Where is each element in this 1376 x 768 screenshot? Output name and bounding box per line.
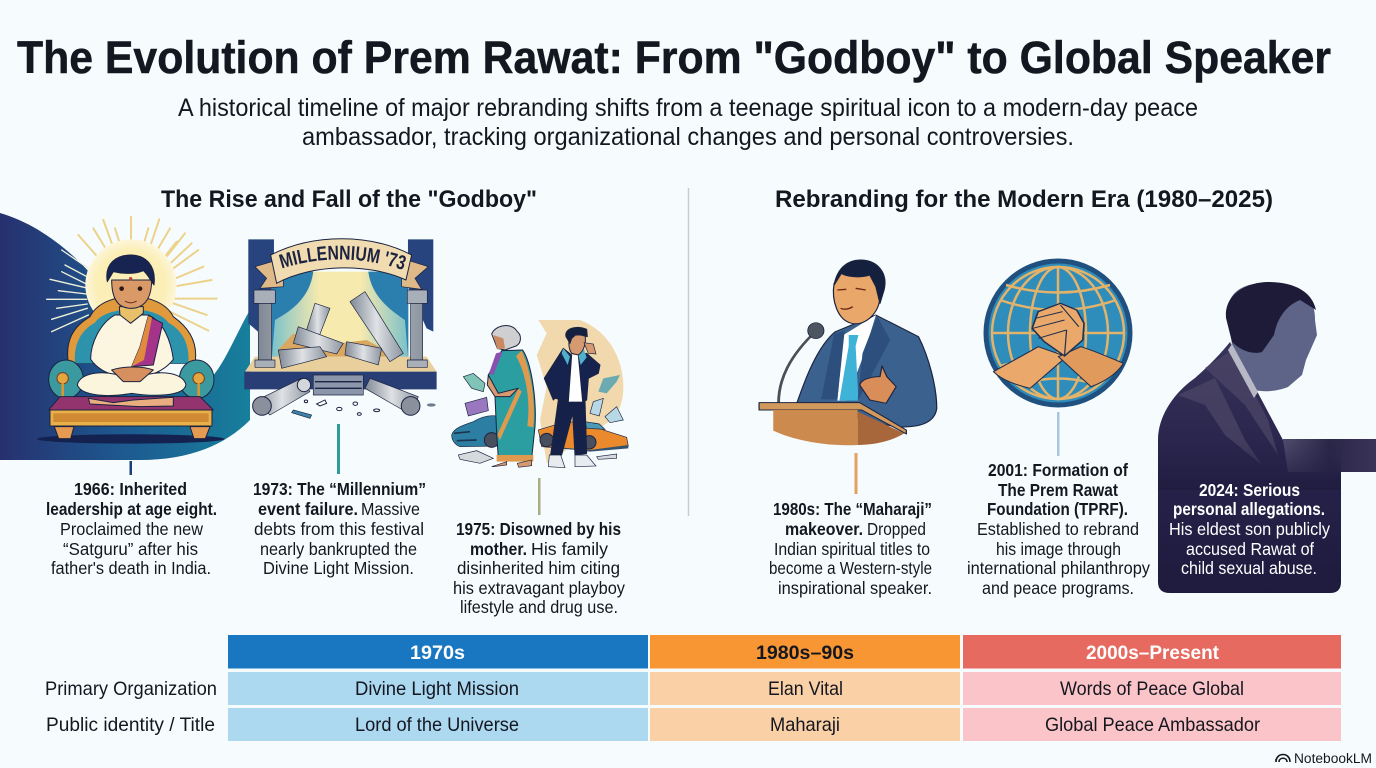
face (112, 280, 152, 308)
text: 1975 (453, 519, 625, 617)
row label: public identity: Public identity / Title (46, 714, 215, 736)
cell: Divine Light Mission (228, 672, 648, 705)
hair (107, 255, 154, 285)
connector: 2001 (1057, 412, 1060, 456)
mother head (492, 326, 520, 350)
debris (292, 410, 312, 418)
text: 1980s: makeover. (785, 519, 863, 539)
icon: speaker at podium (759, 260, 937, 445)
text: 2001 (967, 460, 1150, 598)
text: 2001: Established to rebrand (977, 519, 1139, 539)
text: 1966: “Satguru” after his (63, 539, 198, 559)
face (833, 270, 880, 324)
blue car (452, 416, 498, 447)
halo (85, 239, 177, 331)
icon: globe with clasped hands (986, 261, 1130, 405)
connector: 1973 (337, 424, 340, 474)
cell: Words of Peace Global (963, 672, 1341, 705)
icon: child guru on throne (37, 217, 225, 444)
clasped arms and hands (994, 303, 1123, 388)
table header 1970s (228, 635, 648, 668)
text: 1973: event failure. (258, 499, 358, 519)
mother arm (487, 375, 518, 397)
mother sari (488, 350, 535, 458)
text: 2001: The Prem Rawat (998, 480, 1118, 500)
text: 1980s: Indian spiritual titles to (774, 539, 930, 559)
text: 2024: child sexual abuse. (1181, 558, 1317, 578)
subtitle (178, 94, 1198, 151)
hair (834, 260, 885, 303)
banner (255, 258, 428, 289)
text: 1975: mother. (470, 539, 527, 559)
son head (569, 335, 585, 355)
heading: rebranding: Rebranding for the Modern Era (1980–2025) (775, 186, 1273, 213)
suit (797, 315, 937, 427)
desk bar (1283, 439, 1376, 472)
connector: 1980s (854, 453, 858, 494)
text: 1980s (769, 499, 932, 598)
cell: Lord of the Universe (228, 708, 648, 741)
feet (88, 397, 173, 407)
text: 2024: accused Rawat of (1186, 539, 1314, 559)
text: 2001: and peace programs. (982, 578, 1134, 598)
throne back (68, 297, 196, 363)
text: 2001: his image through (996, 539, 1121, 559)
son jacket (544, 348, 600, 402)
text: 1973: nearly bankrupted the (260, 539, 417, 559)
stage backdrop (272, 272, 408, 360)
banner text: MILLENNIUM '73 (278, 246, 406, 270)
text: 1975: lifestyle and drug use. (460, 597, 618, 617)
text: 2024 (1169, 480, 1330, 578)
connector: 1966 (130, 461, 132, 475)
text: 2024: His eldest son publicly (1169, 519, 1330, 539)
cell: Global Peace Ambassador: Global Peace Ambassador (1045, 714, 1260, 736)
bolsters (49, 360, 83, 399)
text: 1966: father's death in India. (51, 558, 211, 578)
eyes and mouth (119, 286, 124, 291)
table header 1970s: 1970s (410, 642, 465, 664)
text: 1973: Divine Light Mission. (263, 558, 414, 578)
podium body (773, 410, 858, 445)
head (1228, 283, 1317, 391)
table header 2000s-present: 2000s–Present (1086, 642, 1219, 664)
row label: primary organization: Primary Organization (45, 678, 217, 700)
shadow (37, 434, 225, 444)
table header 1980s-90s (650, 635, 960, 668)
side pillars (258, 303, 423, 360)
hand (860, 366, 896, 403)
cell: Maharaji: Maharaji (770, 714, 840, 736)
text: 1975: 1975: Disowned by his (456, 519, 621, 539)
swoosh: blue wave background (0, 213, 250, 460)
logo: NotebookLM: NotebookLM (1294, 751, 1372, 766)
subtitle: A historical timeline of major rebranding shifts from a teenage spiritual icon to a modern-day peace (178, 94, 1198, 122)
table: organizations and titles by era (45, 635, 1341, 741)
torso (91, 315, 173, 375)
cell: Elan Vital: Elan Vital (768, 678, 843, 700)
floating items (465, 397, 488, 416)
text: 1966: Proclaimed the new (60, 519, 203, 539)
text: 2001: international philanthropy (967, 558, 1150, 578)
title: The Evolution of Prem Rawat: From "Godboy" to Global Speaker (17, 32, 1331, 83)
text: 1975: disinherited him citing (457, 558, 620, 578)
text: 1980s: inspirational speaker. (778, 578, 932, 598)
text: 1980s: become a Western-style (769, 558, 932, 578)
son shoe (548, 455, 596, 468)
stage floor (245, 357, 437, 372)
text: 1973: Massive (361, 499, 420, 519)
text: 1966 (46, 479, 217, 578)
text: 1980s: 1980s: The “Maharaji” (773, 499, 932, 519)
icon: Millennium 73 ruined stage (244, 238, 437, 419)
text: 1973: debts from this festival (254, 519, 424, 539)
lapel highlight (1178, 350, 1278, 465)
text: 2024: personal allegations. (1173, 499, 1325, 519)
legs (77, 373, 186, 396)
lower fade (1158, 440, 1341, 490)
cell: Lord of the Universe: Lord of the Universe (355, 714, 519, 736)
orange car (538, 422, 628, 451)
text: 1973 (253, 479, 426, 578)
son legs (551, 400, 587, 455)
curtains (248, 239, 433, 333)
collar (119, 307, 143, 323)
podium top (759, 403, 906, 434)
text: 2001: 2001: Formation of (988, 460, 1128, 480)
lapels (821, 316, 890, 401)
hair (1226, 282, 1316, 353)
text: 1973: 1973: The “Millennium” (253, 479, 426, 499)
mouth and eyes (837, 288, 866, 309)
shirt and tie (837, 315, 876, 401)
silhouette (1158, 342, 1341, 593)
text: 1980s: Dropped (867, 519, 926, 539)
connector: 1975 (538, 478, 540, 515)
text: 1966: leadership at age eight. (46, 499, 217, 519)
heading: rise and fall: The Rise and Fall of the "Godboy" (161, 186, 537, 213)
text: 2001: Foundation (TPRF). (987, 499, 1128, 519)
cell: Global Peace Ambassador (963, 708, 1341, 741)
sand backdrop (537, 320, 623, 463)
sash (132, 316, 163, 367)
cell: Maharaji (650, 708, 960, 741)
panel: 2024 allegations dark figure (1158, 282, 1376, 593)
cell: Words of Peace Global: Words of Peace Global (1060, 678, 1244, 700)
microphone (779, 330, 817, 403)
son shirt (568, 355, 583, 402)
sun rays (47, 217, 217, 332)
cell: Elan Vital (650, 672, 960, 705)
broken columns (305, 303, 330, 338)
cell: Divine Light Mission: Divine Light Mission (355, 678, 519, 700)
seat (49, 397, 213, 410)
hands (112, 367, 153, 382)
icon: mother and son (452, 320, 628, 468)
subtitle: ambassador, tracking organizational changes and personal controversies. (302, 123, 1074, 151)
table header 2000s-present (963, 635, 1341, 668)
text: 1975: His family (531, 539, 608, 559)
text: 2024: 2024: Serious (1199, 480, 1300, 500)
fallen columns (254, 378, 310, 415)
table header 1980s-90s: 1980s–90s (756, 642, 854, 664)
text: 1975: his extravagant playboy (453, 578, 625, 598)
text: 1966: 1966: Inherited (74, 479, 187, 499)
mother feet (492, 460, 532, 467)
